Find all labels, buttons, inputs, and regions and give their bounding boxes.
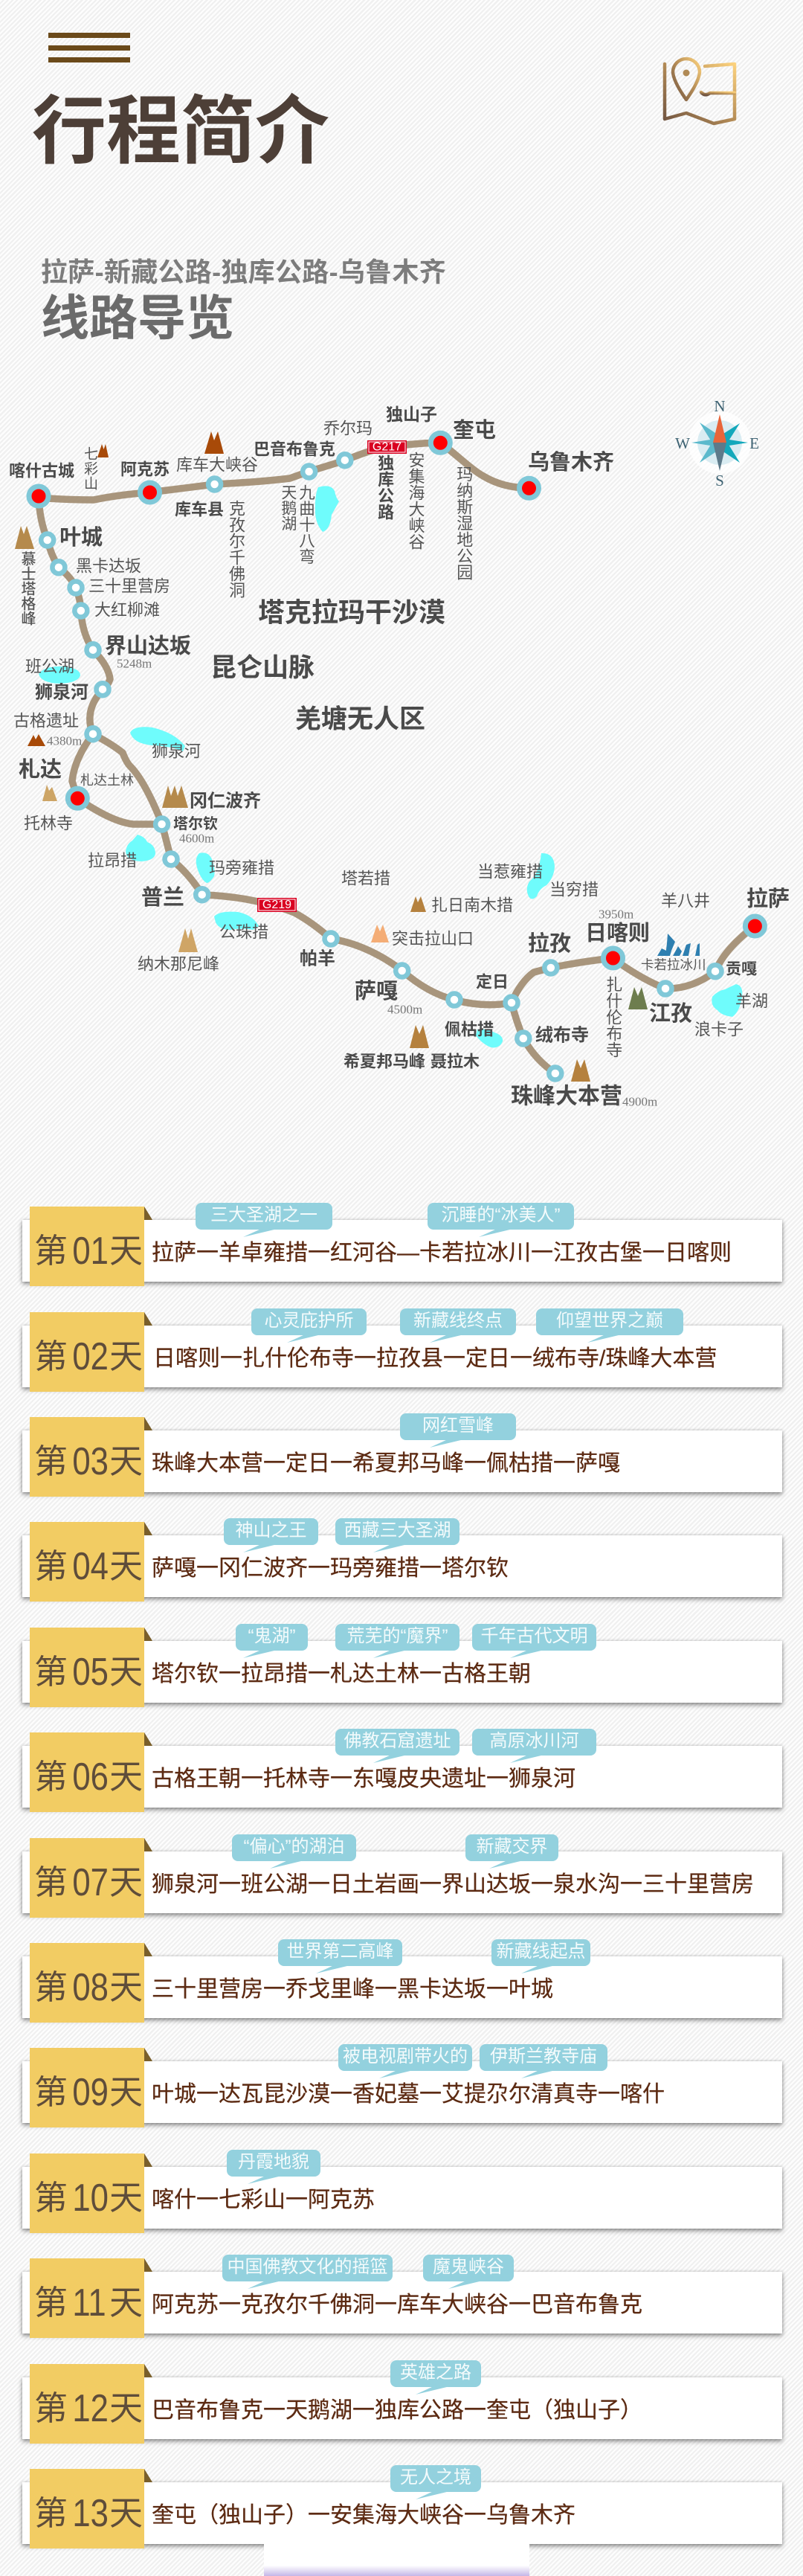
vertical labels: 天鹅湖 — [280, 484, 297, 531]
day tab: 04 — [72, 1545, 109, 1588]
day tab: 天 — [109, 1442, 143, 1480]
vertical labels: 九曲十八弯 — [297, 484, 315, 565]
elevation labels: 4500m — [387, 1003, 422, 1016]
callout: 千年古代文明 — [480, 1626, 587, 1646]
place labels: scenic spots: 库车大峡谷 — [176, 455, 258, 475]
day tab — [30, 2469, 144, 2548]
route text: 奎屯（独山子）一安集海大峡谷一乌鲁木齐 — [152, 2503, 575, 2528]
card — [22, 1956, 782, 2018]
card — [22, 1326, 782, 1387]
region labels — [210, 597, 445, 733]
callout: 仰望世界之巅 — [556, 1311, 663, 1331]
place labels: scenic spots: 扎日南木措 — [431, 896, 513, 915]
day tab: 第 — [34, 2179, 68, 2217]
day tab: 第 — [34, 1547, 68, 1585]
card — [22, 1220, 782, 1282]
subtitle: route name: 拉萨-新藏公路-独库公路-乌鲁木齐 — [41, 257, 446, 287]
place labels: major stops: 普兰 — [141, 885, 184, 910]
callout: 荒芜的“魔界” — [346, 1626, 448, 1646]
place labels: scenic spots: 浪卡子 — [694, 1021, 744, 1038]
highway badges — [257, 440, 407, 912]
day tab — [30, 1838, 144, 1918]
callout — [465, 1834, 558, 1861]
day tab: 天 — [109, 2389, 143, 2427]
callout: 新藏线终点 — [413, 1311, 503, 1331]
place labels: scenic spots: 古格遗址 — [13, 711, 79, 730]
tab fold — [144, 1628, 152, 1641]
callout — [491, 1939, 590, 1966]
tab fold — [144, 2258, 152, 2272]
place labels: scenic spots — [13, 420, 768, 1038]
callout: 英雄之路 — [400, 2363, 471, 2383]
callout — [224, 1518, 318, 1545]
lakes — [39, 486, 742, 1047]
panel: day 07 — [19, 1834, 785, 1919]
elevation labels: 4900m — [622, 1095, 657, 1108]
day tab — [30, 1732, 144, 1812]
panel: day 12 — [19, 2360, 785, 2444]
compass rose: E — [749, 434, 759, 452]
place labels: major stops: 叶城 — [59, 525, 103, 550]
callout — [278, 1939, 402, 1966]
vertical labels: 扎什伦布寺 — [604, 976, 622, 1058]
callout: 丹霞地貌 — [238, 2152, 309, 2172]
place labels: major stops: 贡嘎 — [726, 961, 757, 977]
vertical labels: 克孜尔千佛洞 — [227, 500, 245, 598]
tab fold — [144, 1417, 152, 1430]
day tab — [30, 1522, 144, 1602]
callout — [335, 1624, 459, 1651]
day tab: 天 — [109, 1968, 143, 2006]
panel: day 04 — [19, 1518, 785, 1602]
place labels: major stops: 定日 — [476, 973, 509, 991]
place labels: major stops: 帕羊 — [300, 949, 335, 969]
day tab — [30, 1207, 144, 1286]
callout — [423, 2255, 514, 2281]
place labels: major stops: 萨嘎 — [355, 979, 398, 1003]
place labels: scenic spots: 公珠措 — [219, 922, 268, 942]
day tab: 天 — [109, 1758, 143, 1796]
day tab: 天 — [109, 2073, 143, 2111]
place labels: scenic spots: 玛旁雍措 — [209, 858, 274, 878]
route text: 阿克苏一克孜尔千佛洞一库车大峡谷一巴音布鲁克 — [152, 2293, 642, 2317]
panel: day 06 — [19, 1729, 785, 1814]
day tab — [30, 2364, 144, 2444]
place labels: major stops: 喀什古城 — [9, 461, 74, 481]
compass rose — [675, 397, 759, 489]
callout: 神山之王 — [235, 1520, 306, 1541]
callout — [472, 1624, 596, 1651]
heading: route overview: 线路导览 — [41, 291, 234, 345]
card — [22, 1851, 782, 1913]
route text: 叶城一达瓦昆沙漠一香妃墓一艾提尕尔清真寺一喀什 — [152, 2082, 665, 2107]
route text: 萨嘎一冈仁波齐一玛旁雍措一塔尔钦 — [152, 1556, 509, 1581]
callout: 三大圣湖之一 — [210, 1205, 317, 1225]
route text: 古格王朝一托林寺一东嘎皮央遗址一狮泉河 — [152, 1767, 575, 1791]
elevation labels: 4600m — [179, 832, 214, 845]
callout — [232, 1834, 356, 1861]
place labels: scenic spots: 狮泉河 — [152, 742, 201, 760]
place labels: scenic spots: 当惹雍措 — [477, 863, 543, 881]
icon: glacier — [657, 934, 700, 956]
panel: day 13 — [19, 2465, 785, 2550]
callout: “偏心”的湖泊 — [244, 1837, 344, 1857]
icon: folded map with pin — [663, 57, 736, 125]
mountain icons — [15, 431, 648, 1082]
callout — [196, 1203, 332, 1230]
card — [22, 1535, 782, 1597]
callout: 魔鬼峡谷 — [433, 2257, 504, 2277]
callout: 中国佛教文化的摇篮 — [228, 2257, 388, 2277]
place labels: major stops: 江孜 — [649, 1001, 692, 1026]
day tab: 第 — [34, 2073, 68, 2111]
elevation labels: 5248m — [117, 656, 152, 671]
region labels: 昆仑山脉 — [210, 653, 315, 683]
place labels: scenic spots: 班公湖 — [25, 658, 74, 675]
vertical labels: 慕士塔格峰 — [19, 551, 36, 626]
place labels: scenic spots: 黑卡达坂 — [76, 556, 141, 576]
callout — [236, 1624, 308, 1651]
panel: day 05 — [19, 1624, 785, 1708]
card — [22, 2482, 782, 2544]
callout: 沉睡的“冰美人” — [442, 1205, 560, 1225]
place labels: scenic spots: 羊湖 — [735, 992, 768, 1010]
day tab: 天 — [109, 1863, 143, 1901]
callout — [227, 2150, 320, 2177]
place labels: scenic spots: 卡若拉冰川 — [641, 957, 706, 972]
day tab: 第 — [34, 1863, 68, 1901]
card — [22, 1641, 782, 1703]
callout — [335, 1729, 459, 1756]
card — [22, 2167, 782, 2229]
region labels: 羌塘无人区 — [295, 705, 425, 733]
route text: 塔尔钦一拉昂措一札达土林一古格王朝 — [152, 1662, 531, 1686]
callout — [251, 1308, 367, 1335]
callout: “鬼湖” — [248, 1626, 295, 1646]
day tab: 03 — [72, 1440, 109, 1483]
callout — [390, 2465, 481, 2492]
place labels: scenic spots: 三十里营房 — [88, 577, 170, 595]
tab fold — [144, 2364, 152, 2377]
card — [22, 2377, 782, 2439]
callout: 西藏三大圣湖 — [344, 1520, 451, 1541]
compass rose: W — [675, 434, 690, 452]
day tab — [30, 2258, 144, 2338]
callout — [428, 1203, 574, 1230]
day tab: 天 — [109, 1547, 143, 1585]
day tab: 09 — [72, 2071, 109, 2114]
day tab — [30, 1417, 144, 1497]
place labels: scenic spots: 当穷措 — [549, 881, 599, 899]
place labels: major stops: 佩枯措 — [445, 1021, 494, 1038]
route text: 三十里营房一乔戈里峰一黑卡达坂一叶城 — [152, 1977, 553, 2002]
route text: 狮泉河一班公湖一日土岩画一界山达坂一泉水沟一三十里营房 — [152, 1872, 754, 1897]
callout — [536, 1308, 683, 1335]
highway badges: G219 — [262, 899, 291, 911]
day tab: 10 — [72, 2177, 109, 2220]
day tab: 天 — [109, 1232, 143, 1270]
callout: 世界第二高峰 — [287, 1941, 394, 1962]
day tab: 第 — [34, 2494, 68, 2532]
day tab: 06 — [72, 1756, 109, 1799]
tab fold — [144, 1838, 152, 1851]
panel: day 10 — [19, 2150, 785, 2235]
title: 行程简介 — [32, 71, 329, 179]
day tab: 05 — [72, 1651, 109, 1694]
route map — [9, 397, 790, 1108]
day tab: 第 — [34, 1758, 68, 1796]
route text: 巴音布鲁克一天鹅湖一独库公路一奎屯（独山子） — [152, 2398, 642, 2423]
day tab: 07 — [72, 1861, 109, 1904]
callout — [335, 1518, 459, 1545]
callout: 新藏交界 — [476, 1837, 547, 1857]
place labels: scenic spots: 羊八井 — [661, 891, 710, 910]
place labels: major stops: 日喀则 — [585, 921, 650, 945]
place labels: major stops — [9, 405, 790, 1108]
callout — [400, 1413, 516, 1440]
day tab — [30, 2153, 144, 2233]
tab fold — [144, 1312, 152, 1326]
road network — [39, 443, 755, 1073]
day tab: 天 — [109, 2494, 143, 2532]
callout: 网红雪峰 — [422, 1416, 494, 1436]
elevation labels: 3950m — [599, 908, 633, 921]
day tab: 13 — [72, 2492, 109, 2535]
tab fold — [144, 1207, 152, 1220]
station nodes — [29, 433, 764, 1080]
route text: 日喀则一扎什伦布寺一拉孜县一定日一绒布寺/珠峰大本营 — [153, 1346, 717, 1371]
day tab — [30, 1628, 144, 1707]
tab fold — [144, 1943, 152, 1956]
vertical labels — [19, 446, 622, 1058]
place labels: scenic spots: 突击拉山口 — [392, 930, 474, 948]
route text: 珠峰大本营一定日一希夏邦马峰一佩枯措一萨嘎 — [152, 1451, 620, 1476]
place labels: major stops: 界山达坂 — [105, 634, 191, 658]
elevation labels: 4380m — [47, 733, 82, 748]
place labels: scenic spots: 托林寺 — [24, 814, 73, 833]
place labels: major stops: 巴音布鲁克 — [254, 440, 335, 458]
decorative title bars — [48, 33, 130, 62]
day tab: 02 — [72, 1335, 109, 1378]
day tab — [30, 2048, 144, 2127]
callout — [472, 1729, 596, 1756]
card — [22, 1746, 782, 1808]
route text: 拉萨一羊卓雍措一红河谷—卡若拉冰川一江孜古堡一日喀则 — [152, 1241, 732, 1265]
day tab: 第 — [34, 1653, 68, 1691]
place labels: major stops: 希夏邦马峰 — [344, 1052, 425, 1071]
place labels: major stops: 拉孜 — [528, 931, 571, 956]
place labels: scenic spots: 塔若措 — [341, 869, 390, 888]
day tab: 12 — [72, 2387, 109, 2430]
place labels: major stops: 阿克苏 — [120, 460, 170, 479]
callout — [390, 2360, 481, 2387]
card — [22, 2061, 782, 2123]
place labels: major stops: 拉萨 — [746, 887, 790, 911]
place labels: major stops: 狮泉河 — [35, 683, 88, 702]
place labels: major stops: 奎屯 — [453, 418, 496, 443]
day tab: 第 — [34, 2284, 68, 2322]
compass rose: S — [715, 472, 724, 489]
vertical labels: 安集海大峡谷 — [406, 452, 425, 550]
place labels: scenic spots: 乔尔玛 — [323, 420, 373, 437]
day tab — [30, 1312, 144, 1392]
day tab: 天 — [109, 1653, 143, 1691]
tab fold — [144, 1522, 152, 1535]
panel: day 03 — [19, 1413, 785, 1498]
place labels: major stops: 札达 — [19, 757, 62, 782]
highway badges: G217 — [373, 440, 402, 454]
day tab: 第 — [34, 2389, 68, 2427]
day tab: 08 — [72, 1966, 109, 2009]
place labels: major stops: 乌鲁木齐 — [528, 450, 614, 475]
day tab: 第 — [34, 1337, 68, 1375]
callout — [400, 1308, 516, 1335]
place labels: scenic spots: 大红柳滩 — [94, 601, 160, 619]
day tab: 01 — [72, 1230, 109, 1273]
tab fold — [144, 1732, 152, 1746]
tab fold — [144, 2048, 152, 2061]
blurred bottom fragment — [264, 2538, 529, 2576]
day tab: 第 — [34, 1442, 68, 1480]
place labels: scenic spots: 拉昂措 — [88, 851, 137, 870]
callout: 新藏线起点 — [497, 1941, 586, 1962]
vertical labels: 玛纳斯湿地公园 — [454, 466, 473, 580]
day tab: 第 — [34, 1232, 68, 1270]
tab fold — [144, 2469, 152, 2482]
callout: 高原冰川河 — [489, 1731, 578, 1751]
callout: 被电视剧带火的 — [343, 2046, 468, 2066]
day tab: 天 — [109, 1337, 143, 1375]
callout: 佛教石窟遗址 — [344, 1731, 451, 1751]
panel: day 01 — [19, 1203, 785, 1287]
day tab: 天 — [109, 2179, 143, 2217]
callout: 伊斯兰教寺庙 — [490, 2046, 597, 2066]
place labels: major stops: 独山子 — [386, 405, 437, 424]
place labels: major stops: 聂拉木 — [430, 1052, 480, 1071]
place labels: major stops: 塔尔钦 — [173, 815, 218, 832]
card — [22, 1430, 782, 1492]
day tab: 天 — [109, 2284, 143, 2322]
place labels: major stops: 冈仁波齐 — [190, 791, 261, 811]
place labels: scenic spots: 札达土林 — [80, 773, 134, 788]
place labels: major stops: 库车县 — [175, 500, 224, 519]
card — [22, 2272, 782, 2334]
place labels: major stops: 珠峰大本营 — [511, 1085, 622, 1108]
compass rose: N — [714, 397, 726, 415]
vertical labels: 七彩山 — [82, 446, 98, 491]
panel: day 08 — [19, 1939, 785, 2023]
day tab: 11 — [72, 2281, 106, 2325]
panel: day 09 — [19, 2044, 785, 2129]
callout: 心灵庇护所 — [265, 1311, 354, 1331]
vertical labels: 独库公路 — [375, 455, 394, 520]
place labels: major stops: 绒布寺 — [535, 1025, 589, 1046]
route text: 喀什一七彩山一阿克苏 — [152, 2188, 375, 2212]
elevation labels — [47, 656, 657, 1108]
day tab — [30, 1943, 144, 2023]
place labels: scenic spots: 纳木那尼峰 — [138, 955, 219, 973]
callout — [480, 2044, 607, 2071]
callout: 无人之境 — [400, 2467, 471, 2487]
panel: day 02 — [19, 1308, 785, 1393]
tab fold — [144, 2153, 152, 2167]
region labels: 塔克拉玛干沙漠 — [258, 597, 445, 628]
panel: day 11 — [19, 2255, 785, 2339]
day tab: 第 — [34, 1968, 68, 2006]
